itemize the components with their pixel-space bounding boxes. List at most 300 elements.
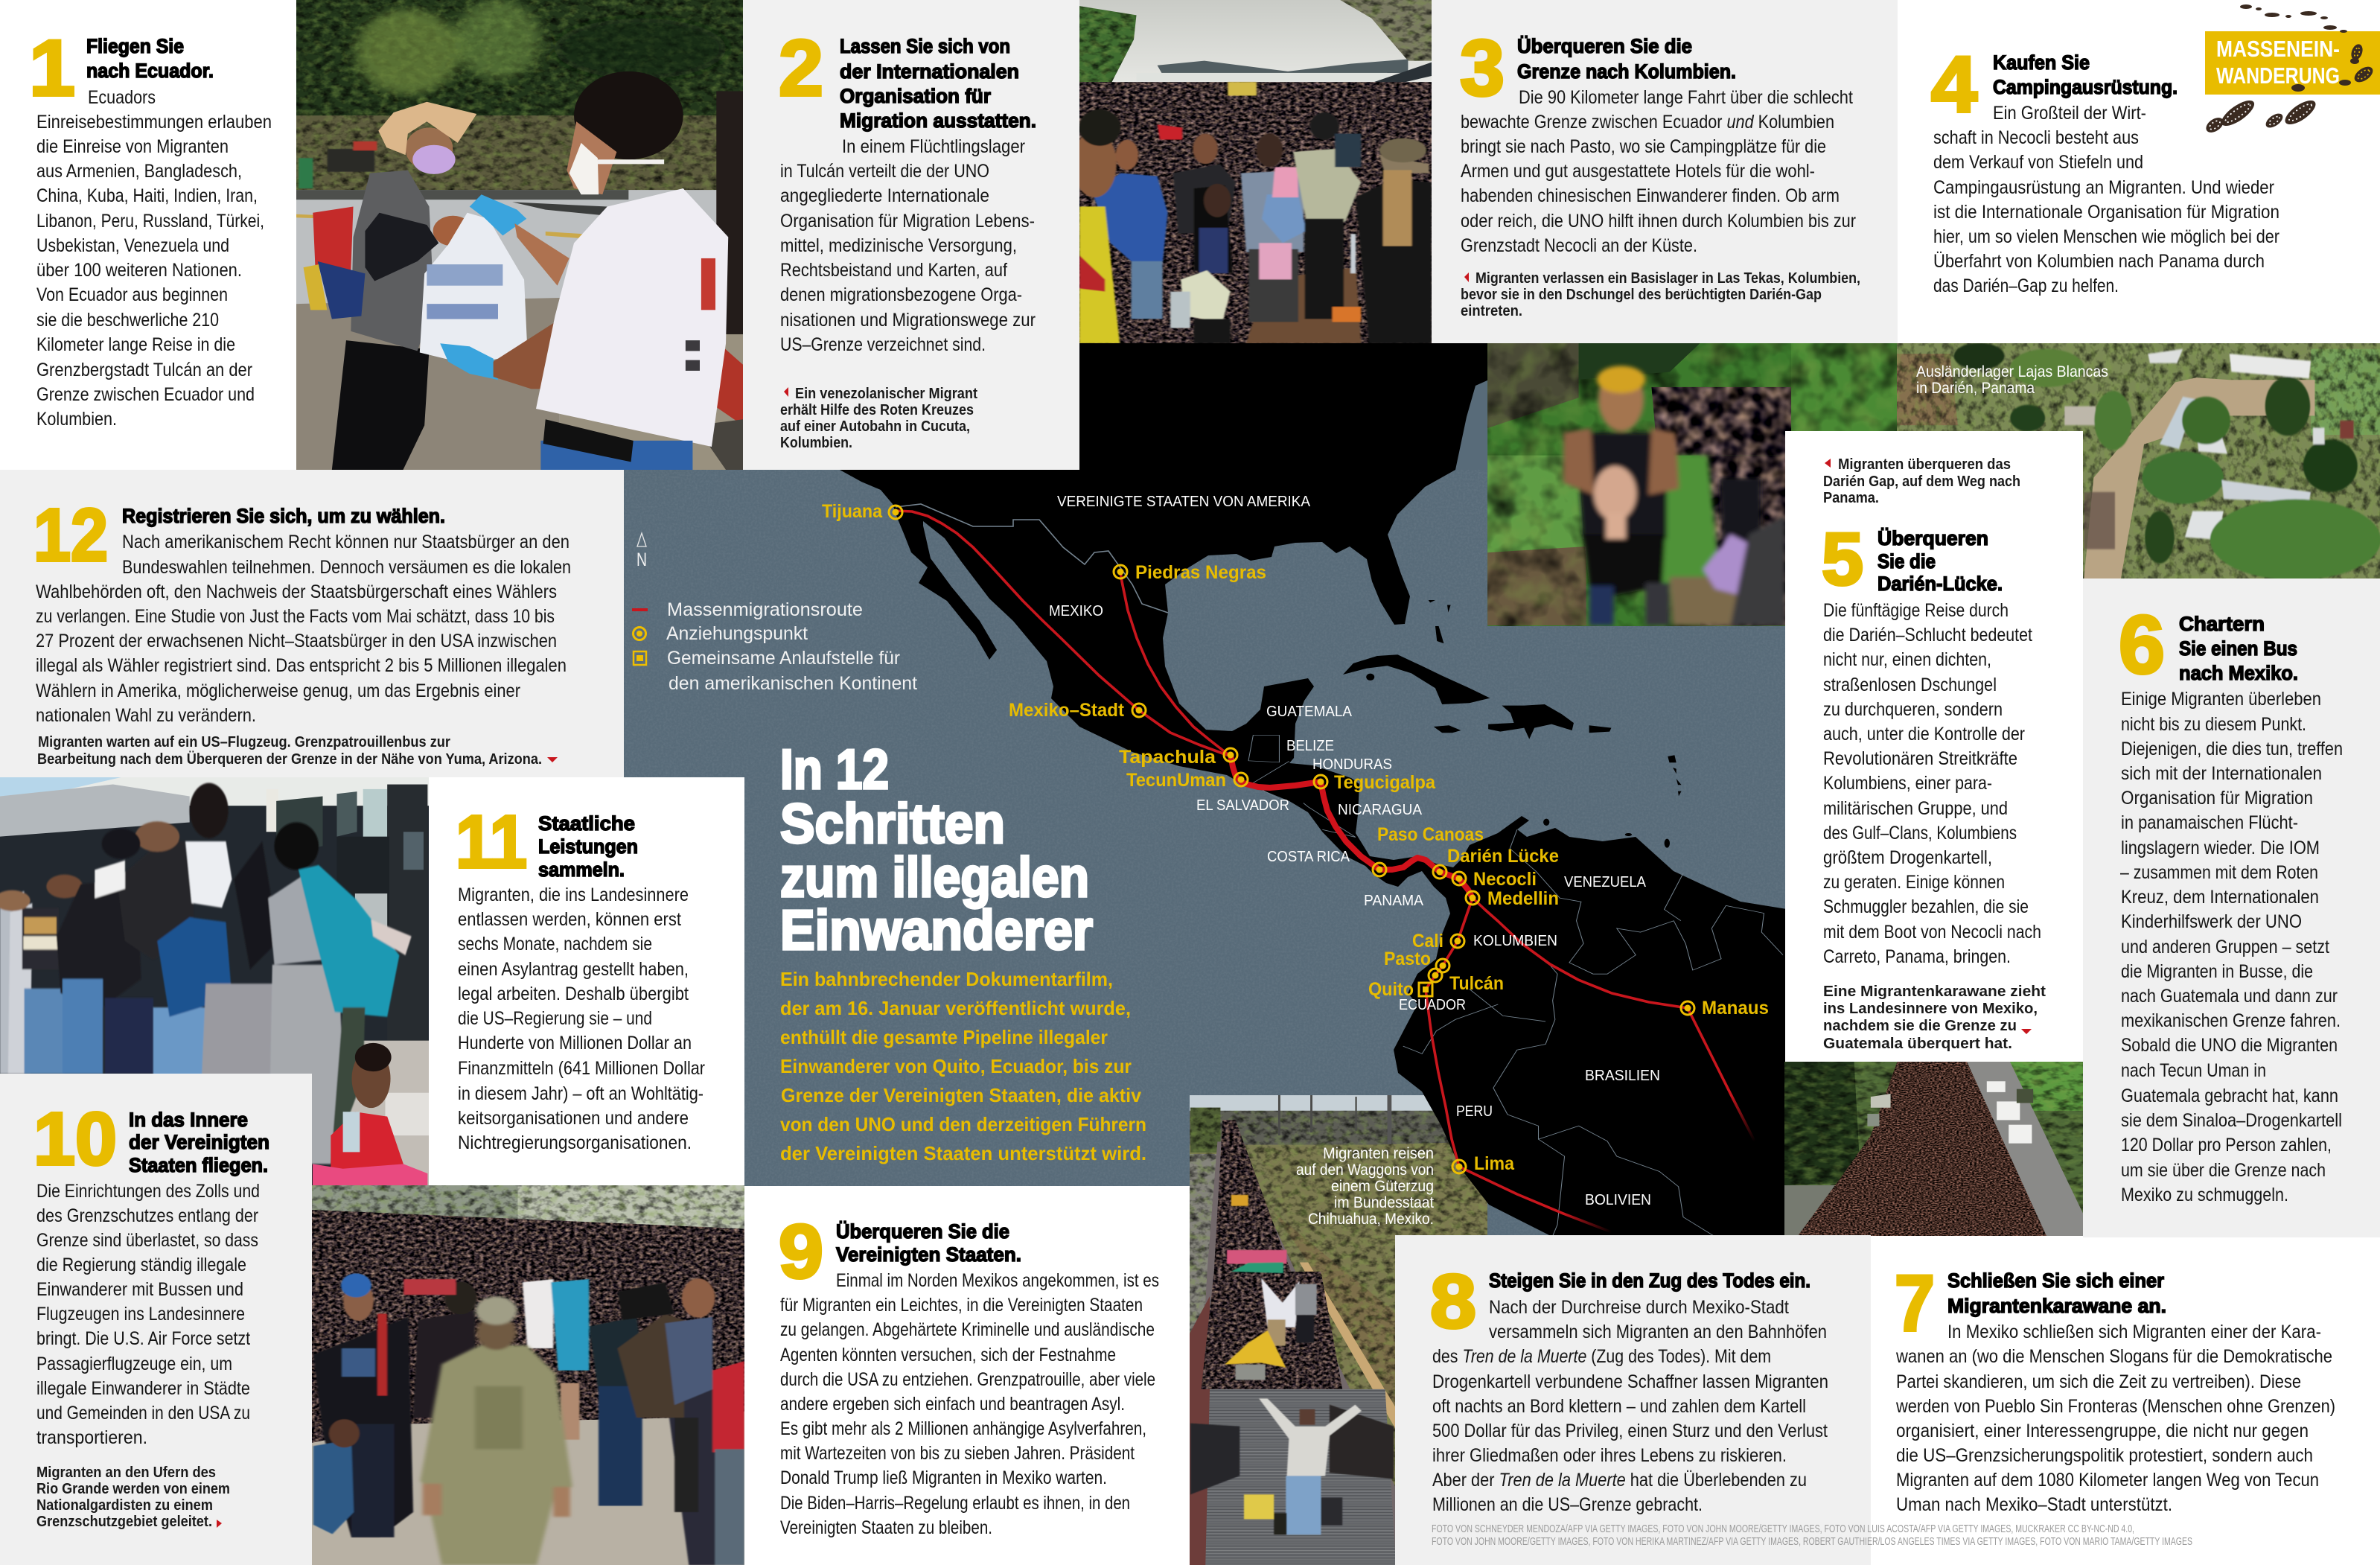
panel 6: charter a bus bbox=[2083, 578, 2380, 1237]
number 5: 5 bbox=[1822, 517, 1863, 600]
body text 6: um sie über die Grenze nach bbox=[2121, 1160, 2326, 1181]
map city labels: Necocli bbox=[1473, 869, 1537, 890]
heading 3 bbox=[1517, 35, 1736, 83]
heading 4: Kaufen Sie bbox=[1993, 51, 2090, 74]
panel 4: buy camping gear bbox=[1898, 0, 2380, 343]
heading 10: Staaten fliegen. bbox=[129, 1154, 268, 1176]
body text 2: denen migrationsbezogene Orga- bbox=[780, 284, 1022, 305]
body text 7: organisiert, einer Interessengruppe, die nicht nur gegen bbox=[1896, 1421, 2309, 1441]
map city labels: Darién Lücke bbox=[1447, 846, 1559, 867]
heading 5: Darién-Lücke. bbox=[1877, 573, 2003, 595]
badge: Masseneinwanderung: MASSENEIN- bbox=[2216, 36, 2340, 62]
body text 1: Kolumbien. bbox=[36, 409, 117, 430]
caption 2: Kolumbien. bbox=[780, 434, 852, 451]
route: Medellin to Manaus and south bbox=[1473, 898, 1731, 1094]
heading 2: Organisation für bbox=[840, 85, 991, 107]
main title: zum illegalen bbox=[780, 846, 1089, 908]
body text 2: Organisation für Migration Lebens- bbox=[780, 211, 1035, 232]
heading 5 bbox=[1877, 527, 2003, 595]
body text 7: In Mexiko schließen sich Migranten einer der Kara- bbox=[1947, 1322, 2321, 1342]
body text 8: des Tren de la Muerte (Zug des Todes). Mit dem bbox=[1432, 1346, 1771, 1367]
heading 10 bbox=[129, 1109, 269, 1176]
train photo caption: im Bundesstaat bbox=[1334, 1194, 1434, 1211]
map legend: Massenmigrationsroute bbox=[667, 599, 863, 620]
body text 12: 27 Prozent der erwachsenen Nicht–Staatsbürger in den USA inzwischen bbox=[36, 631, 557, 651]
body text 6: – zusammen mit dem Roten bbox=[2120, 862, 2318, 883]
number 2: 2 bbox=[779, 23, 823, 112]
badge: Masseneinwanderung bbox=[2205, 31, 2380, 95]
body text 12 bbox=[36, 532, 571, 726]
body text 9: Einmal im Norden Mexikos angekommen, ist es bbox=[836, 1270, 1159, 1291]
number 3: 3 bbox=[1460, 23, 1505, 112]
intro subtitle: der Vereinigten Staaten unterstützt wird. bbox=[780, 1142, 1146, 1164]
heading 5: Sie die bbox=[1877, 550, 1936, 573]
map city labels: Pasto bbox=[1384, 949, 1431, 969]
caption 5 bottom bbox=[1823, 983, 2046, 1052]
body text 3 bbox=[1461, 87, 1856, 256]
intro subtitle: enthüllt die gesamte Pipeline illegaler bbox=[780, 1026, 1108, 1048]
body text 10: und Gemeinden in den USA zu bbox=[36, 1403, 250, 1424]
caption 5 top: Darién Gap, auf dem Weg nach bbox=[1823, 473, 2020, 490]
heading 6 bbox=[2179, 613, 2298, 684]
map city labels: Lima bbox=[1474, 1153, 1515, 1174]
body text 7: wanen an (wo die Menschen Slogans für die Demokratische bbox=[1895, 1346, 2332, 1367]
map city labels: Tapachula bbox=[1119, 747, 1216, 768]
photo: migrants lining up at bus bbox=[0, 777, 429, 1185]
map place markers bbox=[889, 506, 1694, 1173]
heading 12: Registrieren Sie sich, um zu wählen. bbox=[122, 505, 445, 527]
body text 6: und anderen Gruppen – setzt bbox=[2121, 937, 2329, 957]
body text 1: China, Kuba, Haiti, Indien, Iran, bbox=[36, 185, 258, 206]
map country labels: NICARAGUA bbox=[1338, 802, 1423, 818]
intro subtitle: Ein bahnbrechender Dokumentarfilm, bbox=[780, 968, 1113, 990]
map country labels: BELIZE bbox=[1286, 738, 1334, 754]
body text 6: in panamaischen Flücht- bbox=[2121, 812, 2298, 833]
migrant bbox=[332, 340, 430, 470]
body text 3: Die 90 Kilometer lange Fahrt über die schlecht bbox=[1519, 87, 1853, 108]
body text 1: aus Armenien, Bangladesch, bbox=[36, 161, 242, 182]
body text 5: mit dem Boot von Necocli nach bbox=[1823, 922, 2041, 943]
body text 6: nicht bis zu diesem Punkt. bbox=[2121, 714, 2306, 735]
body text 10 bbox=[36, 1181, 260, 1448]
heading 7 bbox=[1947, 1269, 2166, 1317]
soldier bbox=[421, 1296, 572, 1565]
body text 6: nach Tecun Uman in bbox=[2121, 1060, 2266, 1081]
body text 2 bbox=[780, 136, 1036, 355]
route: Tijuana to Tapachula bbox=[896, 511, 1227, 755]
body text 11: Migranten, die ins Landesinnere bbox=[458, 885, 689, 905]
map city labels bbox=[822, 501, 1769, 1174]
body text 10: Einwanderer mit Bussen und bbox=[36, 1279, 243, 1300]
gloves bbox=[470, 194, 526, 235]
body text 11: Nichtregierungsorganisationen. bbox=[458, 1132, 692, 1153]
body text 11: die US–Regierung sie – und bbox=[458, 1008, 652, 1029]
body text 11 bbox=[458, 885, 705, 1153]
body text 5 bbox=[1823, 600, 2041, 967]
map city labels: Tulcán bbox=[1449, 973, 1504, 994]
body text 7: Partei skandieren, um sich die Zeit zu vertreiben). Diese bbox=[1896, 1371, 2301, 1392]
map country labels: ECUADOR bbox=[1399, 997, 1466, 1013]
main title: In 12 bbox=[780, 738, 889, 800]
body text 10: Flugzeugen ins Landesinnere bbox=[36, 1304, 245, 1325]
caption 10: Grenzschutzgebiet geleitet. bbox=[36, 1513, 212, 1530]
body text 1 bbox=[36, 87, 272, 430]
photo: migrant crowd in camp bbox=[1079, 0, 1432, 343]
icon: boot prints below badge bbox=[2204, 96, 2319, 136]
body text 10: Die Einrichtungen des Zolls und bbox=[36, 1181, 260, 1202]
body text 6: sich mit der Internationalen bbox=[2121, 763, 2322, 784]
number 9: 9 bbox=[779, 1209, 823, 1294]
photo: Lajas Blancas camp aerial view bbox=[1897, 343, 2380, 578]
body text 5: Kolumbiens, einer para- bbox=[1823, 773, 1992, 794]
body text 7: Uman nach Mexiko–Stadt unterstützt. bbox=[1896, 1494, 2172, 1515]
body text 1: Einreisebestimmungen erlauben bbox=[36, 112, 272, 133]
intro subtitle: der am 16. Januar veröffentlicht wurde, bbox=[780, 997, 1131, 1019]
photo: migrant with baby in jungle bbox=[1487, 343, 1897, 626]
body text 6: Organisation für Migration bbox=[2121, 788, 2313, 809]
caption 5 top bbox=[1823, 456, 2020, 506]
train photo caption bbox=[1296, 1145, 1434, 1228]
body text 9: durch die USA zu entziehen. Grenzpatrouille, aber viele bbox=[780, 1369, 1155, 1390]
body text 9: Agenten könnten versuchen, sich der Festnahme bbox=[780, 1345, 1116, 1365]
heading 3: Überqueren Sie die bbox=[1517, 35, 1692, 57]
number 12: 12 bbox=[34, 494, 108, 577]
land: Caribbean islands bbox=[1343, 600, 1682, 848]
body text 5: Carreto, Panama, bringen. bbox=[1823, 946, 2011, 967]
map legend: Anziehungspunkt bbox=[666, 623, 808, 644]
heading 5: Überqueren bbox=[1877, 527, 1988, 549]
body text 6: Einige Migranten überleben bbox=[2121, 689, 2321, 710]
camp photo caption: Ausländerlager Lajas Blancas bbox=[1916, 363, 2108, 380]
map city labels: Cali bbox=[1412, 931, 1443, 952]
map legend bbox=[632, 599, 917, 694]
caption 2: auf einer Autobahn in Cucuta, bbox=[780, 418, 970, 435]
body text 7: Migranten auf dem 1080 Kilometer langen Weg von Tecun bbox=[1896, 1470, 2319, 1491]
heading 4 bbox=[1993, 51, 2178, 98]
intro subtitle: von den UNO und den derzeitigen Führern bbox=[780, 1113, 1146, 1135]
body text 10: des Grenzschutzes entlang der bbox=[36, 1205, 258, 1226]
body text 6: Kreuz, dem Internationalen bbox=[2121, 887, 2319, 908]
body text 5: militärischen Gruppe, und bbox=[1823, 798, 2008, 819]
map country labels: VENEZUELA bbox=[1564, 874, 1647, 890]
north arrow: N bbox=[637, 549, 647, 570]
body text 4: dem Verkauf von Stiefeln und bbox=[1933, 152, 2143, 173]
number 8: 8 bbox=[1430, 1259, 1476, 1344]
map land masses bbox=[840, 343, 1787, 1237]
body text 8 bbox=[1432, 1297, 1828, 1515]
caption 5 bottom: ins Landesinnere von Mexiko, bbox=[1823, 1000, 2038, 1017]
panel 12: register to vote bbox=[0, 470, 624, 777]
camp photo caption bbox=[1916, 363, 2108, 397]
body text 1: Kilometer lange Reise in die bbox=[36, 334, 235, 355]
body text 9: Donald Trump ließ Migranten in Mexiko warten. bbox=[780, 1467, 1107, 1488]
panel 5: cross the Darien Gap bbox=[1785, 431, 2083, 1062]
body text 11: legal arbeiten. Deshalb übergibt bbox=[458, 984, 689, 1004]
body text 2: nisationen und Migrationswege zur bbox=[780, 310, 1036, 331]
photo: freight train with migrants on top bbox=[1190, 1095, 1487, 1565]
body text 4: schaft in Necocli besteht aus bbox=[1933, 127, 2139, 148]
heading 4: Campingausrüstung. bbox=[1993, 76, 2178, 98]
heading 2: Migration ausstatten. bbox=[840, 109, 1036, 132]
body text 4: hier, um so vielen Menschen wie möglich bei der bbox=[1933, 226, 2279, 247]
map country labels: EL SALVADOR bbox=[1196, 797, 1289, 814]
panel 3: cross the border to Colombia bbox=[1432, 0, 1898, 343]
heading 2: der Internationalen bbox=[840, 60, 1019, 83]
caption 2: erhält Hilfe des Roten Kreuzes bbox=[780, 401, 974, 418]
body text 9: Vereinigten Staaten zu bleiben. bbox=[780, 1517, 992, 1538]
body text 9: für Migranten ein Leichtes, in die Vereinigten Staaten bbox=[780, 1295, 1143, 1316]
icon: boot prints bbox=[2204, 4, 2376, 136]
caption 3: eintreten. bbox=[1461, 302, 1522, 319]
body text 4: Überfahrt von Kolumbien nach Panama durch bbox=[1933, 251, 2265, 272]
body text 6: Kinderhilfswerk der UNO bbox=[2121, 911, 2302, 932]
body text 1: über 100 weiteren Nationen. bbox=[36, 260, 242, 281]
route: Tegucigalpa to Darien bbox=[1321, 782, 1473, 898]
body text 6: nach Guatemala und dann zur bbox=[2121, 986, 2338, 1007]
map country borders bbox=[896, 504, 1783, 1236]
route: Piedras Negras to Tapachula bbox=[1120, 572, 1227, 753]
train photo caption: einem Güterzug bbox=[1331, 1178, 1434, 1195]
body text 10: bringt. Die U.S. Air Force setzt bbox=[36, 1328, 250, 1349]
caption 10 bbox=[36, 1464, 230, 1530]
body text 5: des Gulf–Clans, Kolumbiens bbox=[1823, 823, 2017, 844]
number 7: 7 bbox=[1895, 1258, 1935, 1348]
panel 1: fly to Ecuador bbox=[0, 0, 296, 470]
train photo caption: auf den Waggons von bbox=[1296, 1161, 1434, 1179]
body text 2: in Tulcán verteilt die der UNO bbox=[780, 161, 989, 182]
map city labels: Tegucigalpa bbox=[1334, 772, 1436, 793]
body text 6: Sobald die UNO die Migranten bbox=[2121, 1035, 2338, 1056]
map country labels: MEXIKO bbox=[1049, 603, 1103, 619]
map country labels: COSTA RICA bbox=[1267, 849, 1350, 865]
panel 10: fly into the interior bbox=[0, 1074, 312, 1565]
heading 2 bbox=[840, 35, 1036, 132]
caption 3: bevor sie in den Dschungel des berüchtigten Darién-Gap bbox=[1461, 286, 1822, 303]
body text 4: Ein Großteil der Wirt- bbox=[1993, 103, 2146, 124]
body text 11: einen Asylantrag gestellt haben, bbox=[458, 959, 689, 980]
body text 10: transportieren. bbox=[36, 1427, 147, 1448]
body text 10: Passagierflugzeuge ein, um bbox=[36, 1354, 232, 1374]
heading 11: sammeln. bbox=[538, 858, 625, 881]
body text 3: Grenzstadt Necocli an der Küste. bbox=[1461, 235, 1697, 256]
map city labels: Manaus bbox=[1702, 998, 1769, 1019]
camp photo caption: in Darién, Panama bbox=[1916, 380, 2035, 397]
body text 4 bbox=[1933, 103, 2279, 296]
number 1: 1 bbox=[29, 23, 75, 112]
body text 1: Ecuadors bbox=[88, 87, 156, 108]
heading 7: Schließen Sie sich einer bbox=[1947, 1269, 2164, 1292]
body text 5: nicht nur, einen dichten, bbox=[1823, 649, 1991, 670]
body text 9: andere ergeben sich einfach und beantragen Asyl. bbox=[780, 1394, 1125, 1415]
body text 5: Die fünftägige Reise durch bbox=[1823, 600, 2009, 621]
route: Tapachula to Tegucigalpa bbox=[1231, 755, 1321, 788]
body text 5: größtem Drogenkartell, bbox=[1823, 847, 1992, 868]
body text 4: Campingausrüstung an Migranten. Und wieder bbox=[1933, 177, 2274, 198]
body text 5: zu geraten. Einige können bbox=[1823, 872, 2005, 893]
body text 6: 120 Dollar pro Person zahlen, bbox=[2121, 1135, 2332, 1156]
body text 3: bewachte Grenze zwischen Ecuador und Kolumbien bbox=[1461, 112, 1834, 133]
body text 3: oder reich, die UNO hilft ihnen durch Kolumbien bis zur bbox=[1461, 211, 1856, 232]
map legend: Gemeinsame Anlaufstelle für bbox=[667, 648, 900, 669]
body text 3: bringt sie nach Pasto, wo sie Campingplätze für die bbox=[1461, 136, 1826, 157]
heading 11 bbox=[538, 812, 638, 881]
body text 10: illegale Einwanderer in Städte bbox=[36, 1378, 250, 1399]
body text 2: angegliederte Internationale bbox=[780, 185, 989, 206]
land: North and Central America bbox=[840, 343, 1489, 898]
body text 8: Millionen an die US–Grenze gebracht. bbox=[1432, 1494, 1703, 1515]
body text 9 bbox=[780, 1270, 1159, 1538]
map country labels bbox=[1049, 494, 1660, 1208]
body text 1: Usbekistan, Venezuela und bbox=[36, 235, 229, 256]
body text 6: sie dem Sinaloa–Drogenkartell bbox=[2121, 1110, 2342, 1131]
route: Quito to Lima and south bbox=[1426, 989, 1563, 1214]
panel 11: collect government benefits bbox=[429, 777, 744, 1185]
body text 11: Finanzmitteln (641 Millionen Dollar bbox=[458, 1058, 705, 1079]
panel 2: International Organization for Migration bbox=[743, 0, 1079, 470]
caption 2: Ein venezolanischer Migrant bbox=[795, 385, 977, 402]
map city labels: Mexiko–Stadt bbox=[1009, 700, 1125, 721]
map country labels: KOLUMBIEN bbox=[1473, 933, 1557, 949]
map city labels: Medellin bbox=[1487, 888, 1559, 909]
panel 8: board the train of death bbox=[1395, 1235, 1871, 1565]
body text 10: die Regierung ständig illegale bbox=[36, 1255, 246, 1275]
bag bbox=[420, 213, 528, 365]
body text 9: Die Biden–Harris–Regelung erlaubt es ihnen, in den bbox=[780, 1493, 1130, 1514]
body text 12: Wählern in Amerika, möglicherweise genug, um das Ergebnis einer bbox=[36, 680, 520, 701]
heading 6: Chartern bbox=[2179, 613, 2265, 635]
map country labels: BOLIVIEN bbox=[1585, 1192, 1651, 1208]
photo: soldier facing line of migrants bbox=[312, 1185, 744, 1565]
map country labels: GUATEMALA bbox=[1266, 704, 1353, 720]
heading 9: Überqueren Sie die bbox=[836, 1220, 1009, 1243]
body text 6: lingslagern wieder. Die IOM bbox=[2121, 838, 2320, 858]
train photo caption: Migranten reisen bbox=[1323, 1145, 1434, 1162]
body text 1: sie die beschwerliche 210 bbox=[36, 310, 219, 331]
caption 10: Nationalgardisten zu einem bbox=[36, 1497, 213, 1514]
heading 11: Leistungen bbox=[538, 835, 638, 858]
body text 11: in diesem Jahr) – oft an Wohltätig- bbox=[458, 1083, 704, 1104]
body text 12: Wahlbehörden oft, den Nachweis der Staatsbürgerschaft eines Wählers bbox=[36, 581, 557, 602]
heading 1: nach Ecuador. bbox=[86, 60, 214, 82]
body text 8: versammeln sich Migranten an den Bahnhöfen bbox=[1489, 1322, 1827, 1342]
body text 5: zu durchqueren, sondern bbox=[1823, 699, 2003, 720]
body text 6: die Migranten in Busse, die bbox=[2121, 961, 2313, 982]
caption 5 bottom: Guatemala überquert hat. bbox=[1823, 1035, 2012, 1052]
caption 12: Migranten warten auf ein US–Flugzeug. Grenzpatrouillenbus zur bbox=[38, 733, 450, 750]
body text 8: ihrer Gliedmaßen oder ihres Lebens zu riskieren. bbox=[1432, 1445, 1787, 1466]
body text 6: mexikanischen Grenze fahren. bbox=[2121, 1010, 2341, 1031]
heading 6: nach Mexiko. bbox=[2179, 662, 2298, 684]
number 11: 11 bbox=[456, 800, 527, 884]
body text 12: Bundeswahlen teilnehmen. Dennoch versäumen es die lokalen bbox=[122, 557, 571, 578]
body text 11: Hunderte von Millionen Dollar an bbox=[458, 1033, 692, 1054]
heading 7: Migrantenkarawane an. bbox=[1947, 1295, 2166, 1317]
badge: Masseneinwanderung: WANDERUNG bbox=[2216, 63, 2340, 89]
body text 9: zu gelangen. Abgehärtete Kriminelle und ausländische bbox=[780, 1319, 1155, 1340]
caption 3 bbox=[1461, 270, 1860, 319]
body text 10: Grenze sind überlastet, so dass bbox=[36, 1230, 258, 1251]
heading 6: Sie einen Bus bbox=[2179, 637, 2297, 660]
migration routes bbox=[896, 511, 1755, 1232]
map city labels: TecunUman bbox=[1126, 770, 1226, 791]
body text 12: Nach amerikanischem Recht können nur Staatsbürger an den bbox=[122, 532, 570, 552]
body text 1: Grenze zwischen Ecuador und bbox=[36, 384, 255, 405]
body text 8: Drogenkartell verbundene Schaffner lassen Migranten bbox=[1432, 1371, 1828, 1392]
body text 5: Revolutionären Streitkräfte bbox=[1823, 748, 2017, 769]
train photo caption: Chihuahua, Mexiko. bbox=[1308, 1211, 1434, 1228]
body text 2: mittel, medizinische Versorgung, bbox=[780, 235, 1017, 256]
body text 9: Es gibt mehr als 2 Millionen anhängige Asylverfahren, bbox=[780, 1418, 1146, 1439]
main title: Einwanderer bbox=[780, 899, 1093, 961]
map country labels: PERU bbox=[1456, 1103, 1493, 1120]
panel 9: cross the United States bbox=[744, 1186, 1190, 1565]
caption 5 top: Panama. bbox=[1823, 489, 1879, 506]
panel 7: join a migrant caravan bbox=[1871, 1237, 2380, 1565]
body text 7 bbox=[1895, 1322, 2335, 1515]
body text 5: Schmuggler bezahlen, die sie bbox=[1823, 896, 2029, 917]
heading 8: Steigen Sie in den Zug des Todes ein. bbox=[1489, 1269, 1810, 1292]
body text 12: illegal als Wähler registriert sind. Das entspricht 2 bis 5 Millionen illegalen bbox=[36, 655, 567, 676]
aid worker bbox=[494, 322, 602, 389]
body text 5: straßenlosen Dschungel bbox=[1823, 675, 1997, 695]
heading 10: In das Innere bbox=[129, 1109, 248, 1131]
map city labels: Tijuana bbox=[822, 501, 883, 522]
main title bbox=[780, 738, 1093, 961]
heading 3: Grenze nach Kolumbien. bbox=[1517, 60, 1736, 83]
body text 11: keitsorganisationen und andere bbox=[458, 1108, 689, 1129]
heading 2: Lassen Sie sich von bbox=[840, 35, 1010, 57]
body text 3: Armen und gut ausgestattete Hotels für die wohl- bbox=[1461, 161, 1815, 182]
number 10: 10 bbox=[34, 1097, 117, 1181]
land: South America bbox=[1394, 816, 1787, 1237]
heading 1 bbox=[86, 35, 214, 82]
photo: migrant caravan on highway bbox=[1784, 1062, 2083, 1236]
body text 8: Nach der Durchreise durch Mexiko-Stadt bbox=[1489, 1297, 1789, 1318]
caption 10: Rio Grande werden von einem bbox=[36, 1480, 230, 1497]
body text 11: entlassen werden, können erst bbox=[458, 909, 681, 930]
body text 12: nationalen Wahl zu verändern. bbox=[36, 705, 256, 726]
map country labels: VEREINIGTE STAATEN VON AMERIKA bbox=[1057, 494, 1311, 510]
body text 1: Von Ecuador aus beginnen bbox=[36, 284, 228, 305]
caption 12 bbox=[37, 733, 558, 768]
map city labels: Quito bbox=[1368, 979, 1414, 1000]
body text 5: auch, unter die Kontrolle der bbox=[1823, 724, 2025, 745]
main title: Schritten bbox=[780, 792, 1005, 855]
route: Medellin to Quito bbox=[1426, 898, 1473, 989]
map background: sea bbox=[624, 343, 1787, 1237]
body text 1: die Einreise von Migranten bbox=[36, 136, 229, 157]
heading 11: Staatliche bbox=[538, 812, 635, 835]
north arrow bbox=[637, 533, 647, 570]
photo credits bbox=[1432, 1523, 2192, 1548]
body text 8: 500 Dollar für das Privileg, einen Sturz und den Verlust bbox=[1432, 1421, 1828, 1441]
number 4: 4 bbox=[1931, 39, 1977, 129]
body text 6 bbox=[2120, 689, 2343, 1205]
body text 2: US–Grenze verzeichnet sind. bbox=[780, 334, 986, 355]
body text 9: mit Wartezeiten von bis zu sieben Jahren. Präsident bbox=[780, 1443, 1135, 1464]
map legend: den amerikanischen Kontinent bbox=[669, 673, 917, 694]
map country labels: BRASILIEN bbox=[1585, 1068, 1660, 1084]
map country labels: HONDURAS bbox=[1312, 756, 1392, 773]
body text 6: Mexiko zu schmuggeln. bbox=[2121, 1185, 2288, 1205]
heading 9 bbox=[836, 1220, 1021, 1266]
body text 6: Guatemala gebracht hat, kann bbox=[2121, 1086, 2338, 1106]
body text 5: die Darién–Schlucht bedeutet bbox=[1823, 625, 2032, 646]
number 6: 6 bbox=[2119, 599, 2165, 691]
heading 9: Vereinigten Staaten. bbox=[836, 1243, 1021, 1266]
map city labels: Paso Canoas bbox=[1377, 824, 1484, 845]
body text 8: Aber der Tren de la Muerte hat die Überlebenden zu bbox=[1432, 1470, 1807, 1491]
